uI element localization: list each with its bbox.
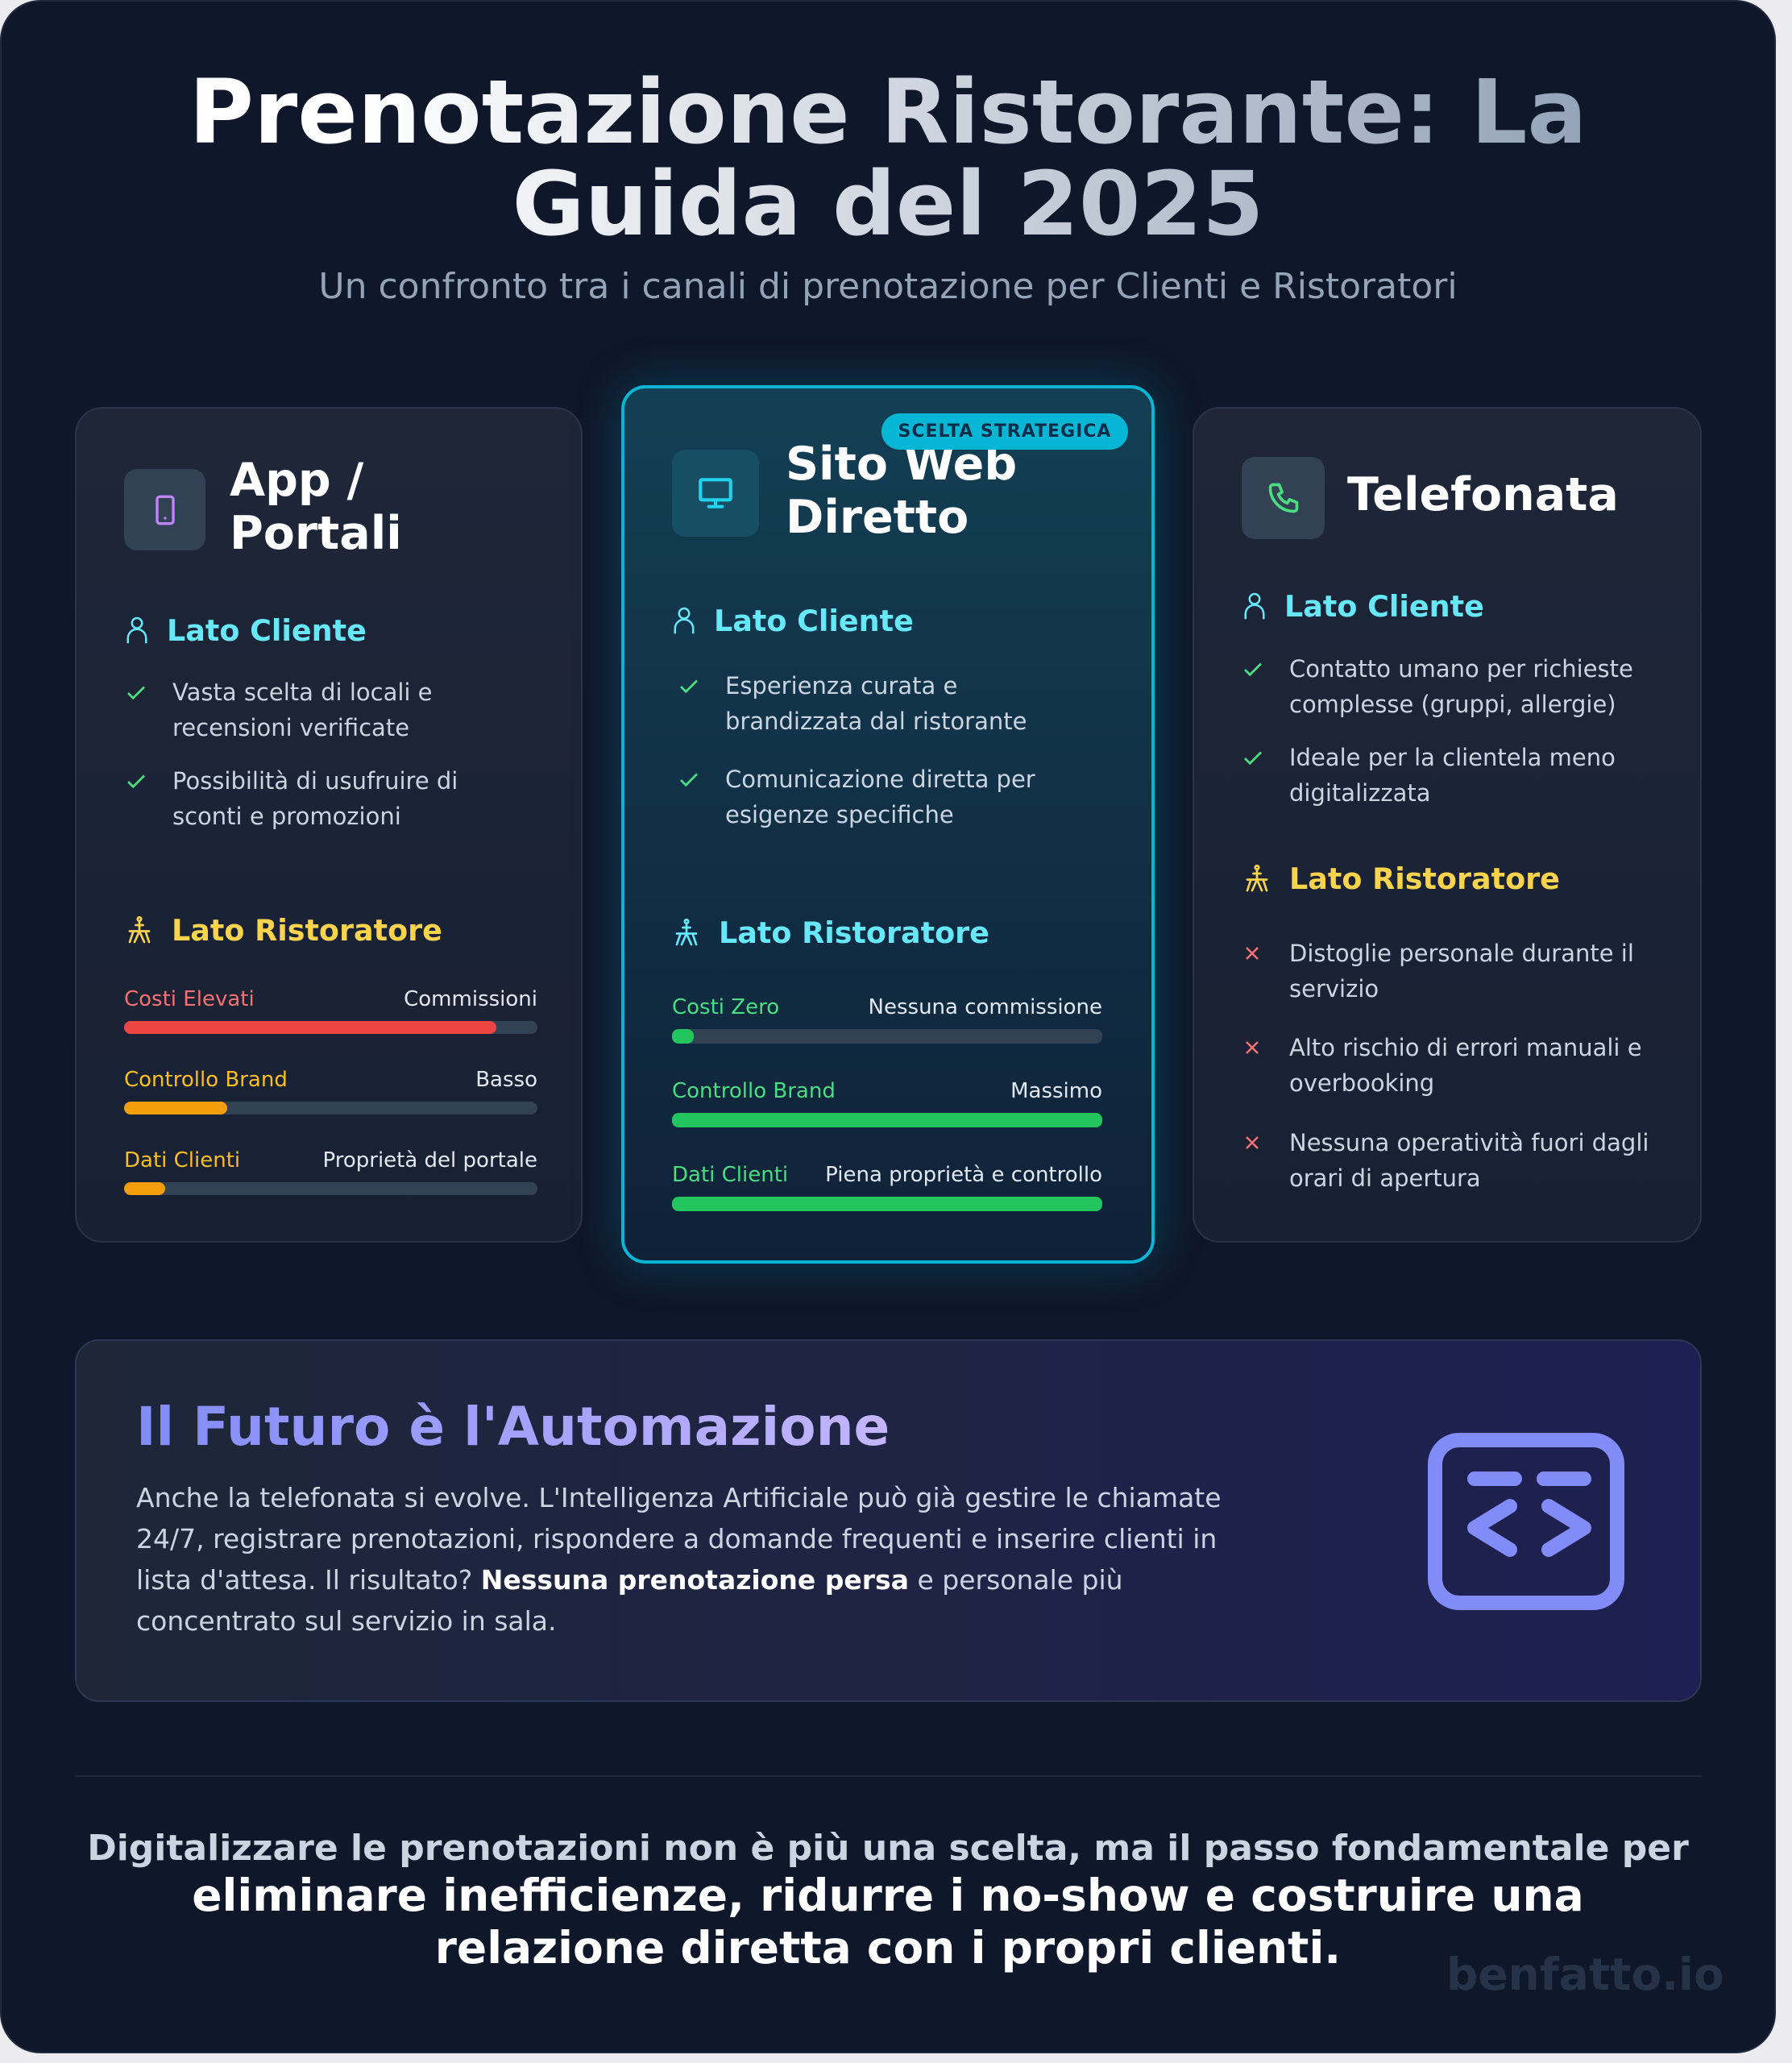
bullets: Vasta scelta di locali e [172,679,433,706]
title: Prenotazione Ristorante: La [189,60,1587,164]
drawbacks [1246,940,1634,1002]
bars: Dati Clienti [124,1148,240,1173]
panel: sito web diretto [621,385,1155,1264]
panel: sito web diretto: Comunicazione diretta per [725,766,1035,793]
bars: Dati Clienti [672,1163,788,1187]
badge: SCELTA STRATEGICA [898,421,1111,442]
panel: telefonata: overbooking [1289,1069,1434,1097]
bullets: Esperienza curata e [725,672,957,699]
paragraph: 24/7, registrare prenotazioni, rispondere a domande frequenti e inserire clienti in [136,1523,1217,1555]
panel: telefonata: orari di apertura [1289,1164,1481,1192]
paragraph [136,1482,1222,1637]
bars: Massimo [1010,1079,1102,1103]
panel: app / portali: Possibilità di usufruire di [172,767,458,795]
panel: telefonata [1193,407,1702,1243]
bullets [680,672,1027,735]
divider [75,1775,1702,1777]
drawbacks: Distoglie personale durante il [1289,940,1634,967]
bullets: Contatto umano per richieste [1289,655,1633,683]
bars: Nessuna commissione [869,995,1102,1019]
icon: code window [1428,1433,1624,1610]
bullets: recensioni verificate [172,714,409,741]
card title: Telefonata [1347,468,1619,521]
bullets [1244,655,1633,718]
bars [124,987,537,1195]
heading: lato cliente: Lato Cliente [1284,589,1484,624]
bars [672,995,1102,1211]
panel: sito web diretto: esigenze specifiche [725,801,954,828]
bars: Costi Elevati [124,987,255,1011]
panel: telefonata: Nessuna operatività fuori dagli [1289,1129,1649,1156]
icon: monitor [672,450,759,537]
heading: lato ristoratore: Lato Ristoratore [1289,861,1560,896]
paragraph: Anche la telefonata si evolve. L'Intelligenza Artificiale può già gestire le chiamate [136,1482,1222,1513]
title [0,66,1776,250]
title: Guida del 2025 [512,152,1264,255]
panel: telefonata: Alto rischio di errori manuali e [1289,1034,1642,1061]
bars: Costi Zero [672,995,779,1019]
card title: Sito Web [786,438,1017,491]
icon: phone [124,469,205,550]
subtitle: Un confronto tra i canali di prenotazione per Clienti e Ristoratori [318,266,1458,307]
heading: lato ristoratore: Lato Ristoratore [172,913,442,948]
bars: Basso [475,1068,537,1092]
card title: Diretto [786,491,969,544]
heading: lato cliente: Lato Cliente [714,604,914,638]
panel: app / portali: sconti e promozioni [172,803,401,830]
bars: Controllo Brand [124,1068,288,1092]
bars: Proprietà del portale [322,1148,537,1173]
card title: Portali [230,507,402,560]
bars: Controllo Brand [672,1079,836,1103]
watermark: benfatto.io [1446,1949,1724,2000]
text: eliminare inefficienze, ridurre i no-show e costruire una [192,1870,1584,1921]
card title: App / [230,454,363,507]
bars: Piena proprietà e controllo [825,1163,1102,1187]
badge [881,413,1128,450]
panel: telefonata: digitalizzata [1289,779,1431,807]
card title [230,454,402,560]
paragraph: concentrato sul servizio in sala. [136,1605,557,1637]
bullets: brandizzata dal ristorante [725,708,1027,735]
panel: app / portali [75,407,583,1243]
card title [786,438,1017,544]
heading: lato cliente: Lato Cliente [167,613,367,648]
heading: lato ristoratore: Lato Ristoratore [719,915,989,950]
drawbacks: servizio [1289,975,1379,1002]
icon: phone handset [1242,457,1325,539]
text: relazione diretta con i propri clienti. [435,1922,1341,1974]
bullets [127,679,433,741]
heading: Il Futuro è l'Automazione [136,1396,890,1458]
paragraph: lista d'attesa. Il risultato? Nessuna prenotazione persa e personale più [136,1564,1123,1596]
panel: automazione [75,1339,1702,1702]
bullets: complesse (gruppi, allergie) [1289,691,1616,718]
bars: Commissioni [404,987,537,1011]
panel: telefonata: Ideale per la clientela meno [1289,744,1616,771]
closing statement: Digitalizzare le prenotazioni non è più una scelta, ma il passo fondamentale per [87,1828,1689,1869]
